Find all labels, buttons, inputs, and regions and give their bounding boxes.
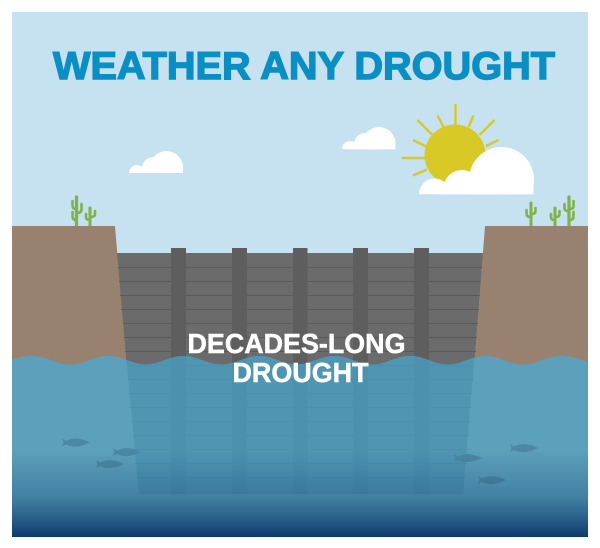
icon: sun (402, 104, 498, 186)
label: decades-long drought (188, 328, 406, 388)
title: WEATHER ANY DROUGHT (53, 45, 555, 88)
deep water gradient (12, 450, 588, 537)
cliff left (12, 226, 127, 370)
label: decades-long drought: DROUGHT (232, 357, 368, 388)
dam above water (117, 248, 483, 370)
cloud: small left (129, 151, 183, 173)
submerged dam (126, 350, 475, 494)
fish (62, 438, 538, 484)
cloud: large by sun (419, 147, 534, 194)
water (12, 356, 588, 537)
cactus group left (72, 197, 95, 226)
cloud: small upper (342, 127, 396, 150)
label: decades-long drought: DECADES-LONG (188, 328, 406, 359)
cactus group right (526, 197, 574, 226)
cliff right (474, 226, 588, 370)
